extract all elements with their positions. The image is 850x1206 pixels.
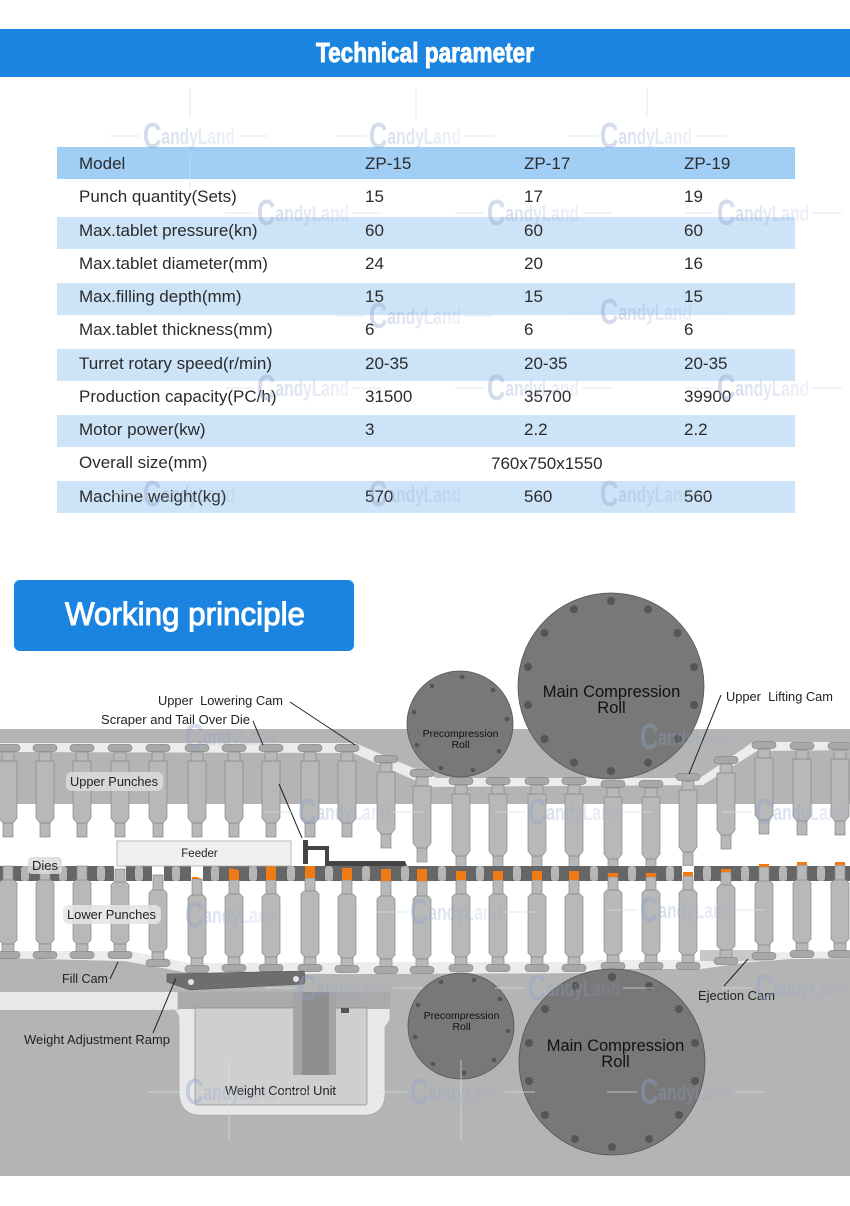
parameter table: 560 [524,487,552,506]
parameter table: 760x750x1550 [491,454,603,473]
precompression roll, bottom: Roll [452,1021,471,1033]
watermarks: andyLand [275,201,349,226]
scraper and tail over die [303,840,407,866]
watermarks: C [185,716,203,757]
main compression roll, bottom: Main Compression [547,1037,684,1055]
parameter table: 35700 [524,387,571,406]
watermarks: andyLand [735,376,809,401]
parameter table: Production capacity(PC/h) [79,387,276,406]
diagram: rotary tablet press working principle [0,593,850,1176]
watermarks: C [640,1071,658,1112]
watermarks: C [143,115,161,156]
label: fill cam: Fill Cam [62,971,108,986]
parameter table: 15 [365,287,384,306]
watermarks: andyLand [387,124,461,149]
watermarks: andyLand [387,482,461,507]
watermarks: C [640,889,658,930]
watermarks: C [717,367,735,408]
watermarks: andyLand [203,903,277,928]
lower punches [0,865,850,974]
parameter table: Overall size(mm) [79,453,207,472]
watermarks: C [143,473,161,514]
parameter table: 560 [684,487,712,506]
parameter table: ZP-19 [684,154,730,173]
main compression roll, bottom: Roll [601,1053,630,1071]
watermarks: andyLand [428,1080,502,1105]
parameter table: 17 [524,187,543,206]
label: weight control unit: Weight Control Unit [225,1083,336,1098]
label: upper lowering cam: Upper Lowering Cam [158,693,283,708]
header band: technical parameter [0,29,850,77]
precompression roll, bottom: Precompression [424,1010,500,1022]
watermarks: andyLand [161,482,235,507]
watermarks: andyLand [316,800,390,825]
label: dies [28,857,62,874]
feeder [117,841,291,866]
parameter table: 20-35 [365,354,408,373]
watermarks: C [755,967,773,1008]
parameter table: 20 [524,254,543,273]
label: upper lifting cam: Upper Lifting Cam [726,689,833,704]
watermarks: andyLand [161,124,235,149]
title: technical parameter: Technical parameter [316,37,534,68]
watermarks: andyLand [203,725,277,750]
parameter table: 15 [365,187,384,206]
watermarks: andyLand [505,376,579,401]
upper cam plate [0,729,850,804]
parameter table: 570 [365,487,393,506]
watermarks: andyLand [387,304,461,329]
parameter table: 6 [365,320,374,339]
parameter table: 6 [684,320,693,339]
label: dies: Dies [32,858,58,873]
watermarks: andyLand [428,900,502,925]
precompression roll, top: Roll [451,739,470,751]
parameter table: 39900 [684,387,731,406]
watermarks: C [755,791,773,832]
heading: working principle: Working principle [65,596,305,632]
main compression roll, top: Roll [597,699,626,717]
watermarks: andyLand [658,725,732,750]
parameter table: 2.2 [524,420,548,439]
watermarks: C [600,291,618,332]
parameter table: 15 [684,287,703,306]
watermarks: C [369,295,387,336]
upper punches [0,742,850,873]
watermarks: andyLand [658,898,732,923]
watermarks: C [487,367,505,408]
parameter table: 6 [524,320,533,339]
watermarks: C [257,192,275,233]
precompression roll, top [407,671,513,777]
main compression roll, top: Main Compression [543,683,680,701]
label: ejection cam: Ejection Cam [698,988,775,1003]
parameter table: ZP-15 [365,154,411,173]
watermarks: andyLand [546,800,620,825]
parameter table: 20-35 [684,354,727,373]
watermarks: andyLand [658,1080,732,1105]
watermarks: C [185,1071,203,1112]
watermarks: andyLand [546,976,620,1001]
watermarks: C [528,967,546,1008]
parameter table: 60 [684,221,703,240]
watermarks: C [185,894,203,935]
parameter table: Max.tablet pressure(kn) [79,221,258,240]
parameter table: ZP-17 [524,154,570,173]
dies strip [0,866,850,881]
parameter table: 60 [524,221,543,240]
watermarks: C [487,192,505,233]
watermarks [143,115,847,1112]
watermarks: C [600,115,618,156]
watermarks: andyLand [505,201,579,226]
label: lower punches: Lower Punches [67,907,156,922]
watermarks: andyLand [618,300,692,325]
watermarks: C [298,791,316,832]
watermarks: C [369,115,387,156]
main compression roll, top [518,593,704,779]
precompression roll, top: Precompression [423,728,499,740]
parameter table [57,147,795,513]
feeder: Feeder [181,848,218,860]
watermarks: C [257,367,275,408]
watermarks: C [528,791,546,832]
parameter table: 60 [365,221,384,240]
label: scraper and tail over die: Scraper and Tail Over Die [101,712,250,727]
watermarks: andyLand [316,976,390,1001]
watermarks: C [410,1071,428,1112]
parameter table: Max.filling depth(mm) [79,287,242,306]
parameter table: Punch quantity(Sets) [79,187,237,206]
parameter table: 20-35 [524,354,567,373]
parameter table: Max.tablet diameter(mm) [79,254,268,273]
watermarks: andyLand [735,201,809,226]
weight adjustment ramp [167,971,305,990]
watermarks: andyLand [618,482,692,507]
parameter table: 16 [684,254,703,273]
watermarks: andyLand [275,376,349,401]
watermarks: C [369,473,387,514]
parameter table: 24 [365,254,384,273]
heading: working principle [14,580,354,651]
watermarks: C [640,716,658,757]
label: weight adjustment ramp: Weight Adjustment Ramp [24,1032,170,1047]
parameter table: 31500 [365,387,412,406]
parameter table: 15 [524,287,543,306]
watermarks: C [410,891,428,932]
watermarks: C [298,967,316,1008]
parameter table: 19 [684,187,703,206]
main compression roll, bottom [519,969,705,1155]
watermarks: C [717,192,735,233]
parameter table: Max.tablet thickness(mm) [79,320,273,339]
label: upper punches: Upper Punches [70,774,158,789]
parameter table: Turret rotary speed(r/min) [79,354,272,373]
watermarks: andyLand [203,1080,277,1105]
watermarks: C [600,473,618,514]
tablet powder in dies [192,862,845,881]
lower cam plate and housing [0,950,850,1176]
parameter table: 3 [365,420,374,439]
watermarks: andyLand [618,124,692,149]
parameter table: Motor power(kw) [79,420,206,439]
precompression roll, bottom [408,973,514,1079]
leader lines [110,695,748,1033]
parameter table: Machine weight(kg) [79,487,226,506]
parameter table: 2.2 [684,420,708,439]
parameter table: Model [79,154,125,173]
